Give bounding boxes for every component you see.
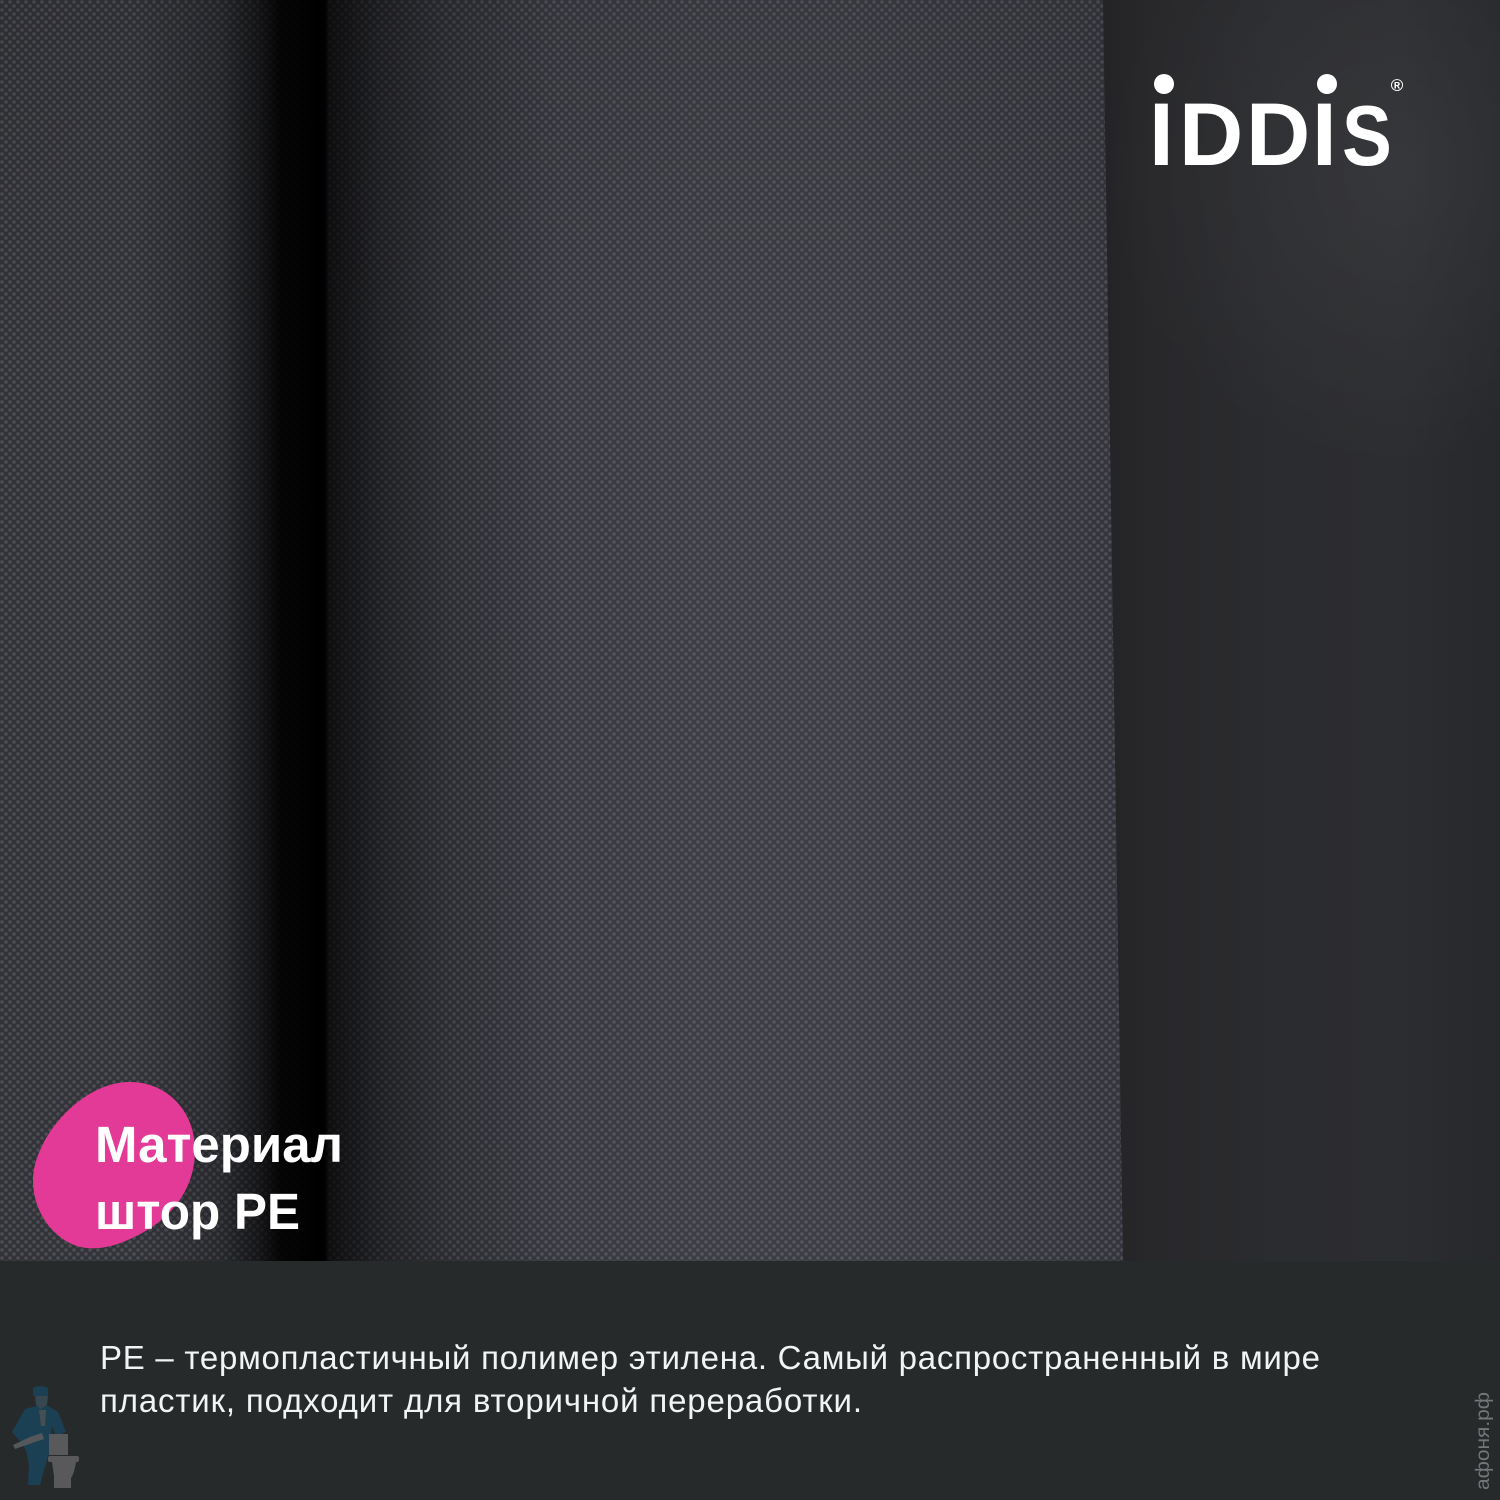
- toilet: [48, 1434, 79, 1488]
- description text: пластик, подходит для вторичной переработки.: [100, 1382, 862, 1419]
- plumber wrench: [13, 1433, 44, 1449]
- heading: штор PE: [95, 1183, 300, 1240]
- logo: IDDIS: S: [1342, 88, 1392, 184]
- logo: IDDIS: IDDI: [1149, 84, 1337, 184]
- pink blob behind heading: [33, 1082, 195, 1248]
- plumber figure: [12, 1386, 66, 1485]
- logo: IDDIS: [1149, 74, 1404, 184]
- logo: registered mark: ®: [1391, 76, 1404, 95]
- watermark: site name: афоня.рф: [1473, 1392, 1494, 1490]
- description text: PE – термопластичный полимер этилена. Самый распространенный в мире: [100, 1339, 1320, 1376]
- plumber face: [35, 1396, 48, 1409]
- panel: bottom description band: [0, 1261, 1500, 1500]
- icon: plumber with toilet watermark: [12, 1386, 79, 1488]
- heading: Материал: [95, 1116, 343, 1173]
- plumber shirt: [39, 1410, 46, 1426]
